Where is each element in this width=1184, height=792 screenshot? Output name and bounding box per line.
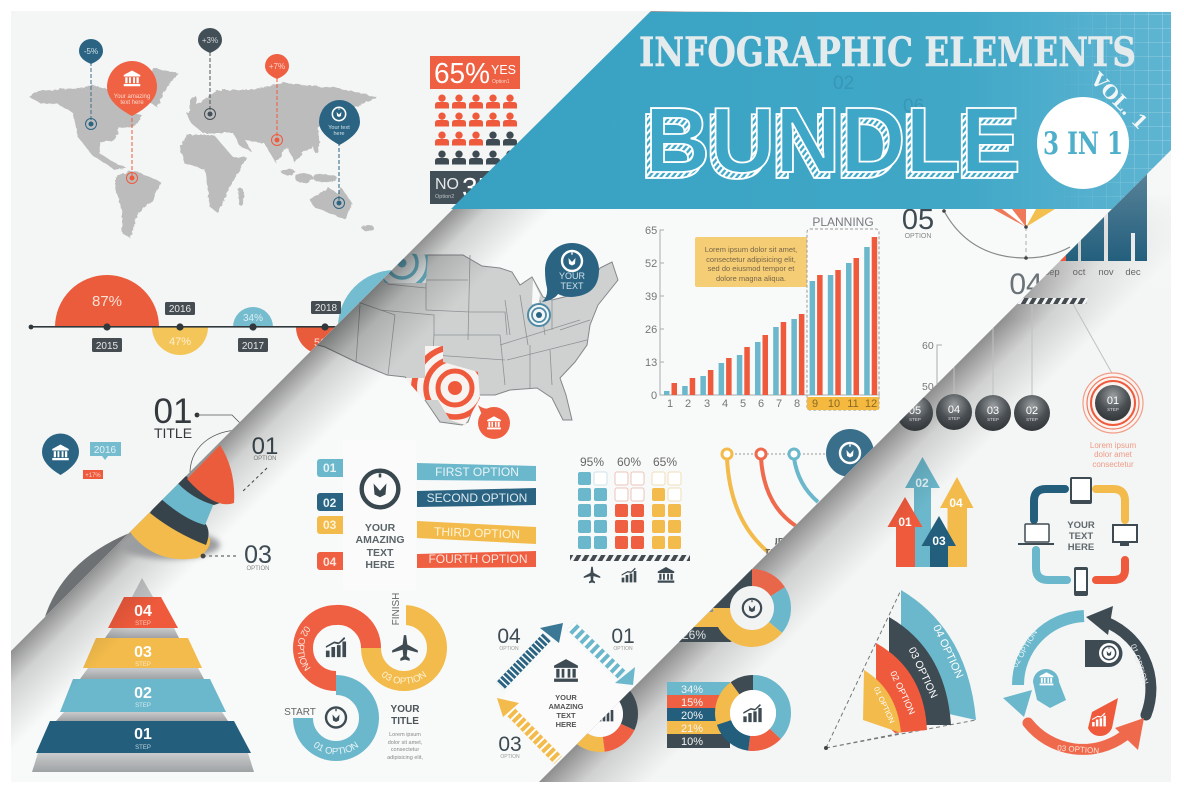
step 03 (83, 638, 202, 668)
icon: clock (326, 708, 346, 728)
arrow 01 dark: 01 OPTION (1129, 643, 1150, 686)
centre panel (343, 440, 416, 590)
no panel (430, 171, 490, 204)
icon marker and small tags (42, 434, 121, 479)
x axis labels: 4 (722, 398, 728, 410)
icon: clock (362, 471, 398, 507)
axis line and dots (29, 323, 371, 331)
numbered tab 04 (317, 552, 349, 570)
sphere 04: STEP (948, 416, 960, 421)
phone (1074, 567, 1088, 596)
tip (132, 578, 153, 597)
year label 2016: 2016 (169, 304, 192, 315)
x axis labels: 5 (740, 398, 746, 410)
yes panel: Option1 (492, 79, 510, 85)
diamond arrows panel (497, 623, 635, 762)
sphere 04 (936, 394, 972, 430)
world map (29, 68, 377, 238)
label 04: OPTION (499, 646, 519, 652)
sphere 01 with rings: 01 (1107, 395, 1119, 407)
monitor (1113, 525, 1137, 546)
Ohio target (528, 304, 550, 326)
x axis labels: 7 (776, 398, 782, 410)
S-shaped process (284, 594, 447, 761)
blue segment (303, 685, 369, 751)
hanging lines (954, 304, 1113, 395)
stacked strips: 34% (681, 684, 703, 696)
diamond text: HERE (556, 720, 576, 729)
donut with stacked bars: clock (676, 578, 782, 642)
arrow 02: 02 (915, 476, 929, 490)
hatched hanger (1013, 298, 1088, 304)
map pin: clock, your text here: Your text (328, 125, 350, 131)
people grid (435, 94, 517, 164)
map pin: -5%: -5% (84, 47, 98, 56)
step 04 (108, 597, 178, 628)
icon: plane (392, 635, 418, 661)
sphere 03: STEP (987, 417, 999, 422)
stacked strips: 26% (682, 628, 706, 642)
arrow 03 red (1028, 718, 1144, 755)
caption (1090, 441, 1136, 469)
fan diagram (824, 590, 976, 750)
ribbon fourth option: FOURTH OPTION (428, 552, 528, 566)
square pictogram chart (570, 455, 690, 583)
month labels: dec (1125, 267, 1141, 278)
Texas target (400, 340, 496, 430)
y axis fragment 60 / 50: 50 (922, 381, 934, 393)
yellow band (130, 512, 210, 559)
numbered tab 03 (317, 516, 349, 534)
centre text: HERE (365, 559, 395, 571)
US map (300, 255, 618, 425)
sphere 02: STEP (1026, 417, 1038, 422)
squares yellow column (652, 472, 681, 549)
x axis labels: 8 (794, 398, 800, 410)
donut ring (722, 682, 784, 744)
dark band upper (174, 476, 220, 505)
sphere 01 with rings: STEP (1107, 407, 1119, 412)
four up arrows (888, 457, 974, 567)
caption: Lorem ipsum (1090, 441, 1136, 450)
yellow note: dolore magna aliqua. (716, 274, 786, 283)
option list with clock panel (317, 440, 536, 590)
month labels: nov (1098, 267, 1114, 278)
bubble 87% (55, 275, 159, 327)
label 01 option: 01 (252, 433, 278, 460)
percent labels (580, 455, 677, 469)
year label 2015: 2015 (96, 341, 119, 352)
month labels: oct (1073, 267, 1086, 278)
icon: chart (326, 637, 346, 657)
percent labels: 60% (617, 455, 641, 469)
faint ghost numbers (833, 73, 924, 117)
sector 02: 02 OPTION (888, 669, 917, 716)
step 01 (36, 721, 251, 753)
arrow 04: 04 (949, 496, 963, 510)
label 01: OPTION (613, 646, 633, 652)
sphere 05: 05 (909, 405, 921, 417)
yes panel (430, 56, 520, 90)
vol. 1: VOL. 1 (1085, 68, 1152, 134)
icon: chart (622, 568, 636, 582)
hatched baseline (570, 555, 690, 561)
stacked strips: 15% (681, 697, 703, 709)
fold highlight at upper end (990, 140, 1184, 320)
diamond text (548, 693, 584, 729)
radial diagram fragment (942, 209, 1070, 260)
centre text (1067, 520, 1095, 553)
arrow 04 (500, 623, 563, 686)
banner background (451, 12, 1171, 209)
step 02: 02 (134, 685, 152, 702)
inner drop bank (1033, 669, 1066, 708)
laptop (1018, 524, 1054, 545)
arrow 03: 03 (932, 534, 946, 548)
donut ring (722, 578, 782, 638)
label 03 option: OPTION (246, 566, 270, 572)
yes/no people chart (430, 56, 520, 204)
arrow 01 dark (1086, 606, 1151, 715)
stacked strips: 10% (681, 736, 703, 748)
percent labels: 65% (653, 455, 677, 469)
curved label 03: 03 OPTION (382, 670, 426, 684)
faint ghost numbers: 06 (903, 96, 924, 117)
badge 3 in 1 (1037, 97, 1129, 189)
sphere 02 (1014, 395, 1050, 431)
step spheres (897, 298, 1143, 469)
step 01: 01 (134, 726, 152, 743)
x axis labels (668, 400, 877, 407)
map pin: clock, your text here: here (333, 131, 345, 137)
sector 01: 01 OPTION (872, 685, 897, 725)
x axis labels: 2 (685, 398, 691, 410)
sphere 02: 02 (1026, 405, 1038, 417)
donut with chart behind diamond (570, 684, 630, 744)
no panel: Option2 (435, 194, 454, 200)
yes panel: 65% (434, 58, 490, 90)
bubble 47%: 47% (169, 336, 191, 348)
label 03: 03 (498, 733, 522, 756)
your title text: YOUR (391, 704, 420, 715)
yes panel: YES (491, 63, 516, 77)
y axis labels: 13 (645, 357, 657, 369)
map pin: +7% (265, 54, 289, 146)
centre text (356, 522, 404, 571)
map pin: bank, your amazing text here (107, 61, 157, 184)
map pin: bank, your amazing text here: Your amazing (114, 94, 150, 100)
squares red column (615, 472, 644, 549)
y axis labels: 0 (651, 390, 657, 402)
x axis labels: 3 (704, 398, 710, 410)
axes (660, 230, 880, 395)
fragment 04 label: 04 (1009, 268, 1043, 301)
rocket shadow crescent (45, 534, 128, 617)
centre text: YOUR (365, 522, 396, 534)
step 03: STEP (135, 662, 151, 668)
ribbon first option: FIRST OPTION (435, 465, 519, 479)
numbered tab 01 (317, 459, 349, 477)
sphere 05 (897, 395, 933, 431)
finish tag: FINISH (391, 593, 402, 625)
year label 2018 (311, 301, 341, 314)
bubble 34%: 34% (243, 313, 263, 324)
curved label 01: 01 OPTION (314, 742, 358, 754)
arrow 02 blue: 02 OPTION (1010, 628, 1039, 669)
step 02: STEP (135, 703, 151, 709)
ribbon second option: SECOND OPTION (427, 491, 527, 505)
label 01: 01 (611, 625, 635, 648)
circular arrows (1003, 606, 1151, 755)
arrow 02 blue (1003, 616, 1084, 717)
grey connector slabs (32, 628, 254, 772)
sector 03: 03 OPTION (906, 645, 940, 700)
centre text: TEXT (367, 547, 394, 559)
x axis labels: 6 (758, 398, 764, 410)
finish tag (391, 593, 406, 628)
your title text: TITLE (391, 716, 419, 727)
sphere 01 with rings (1083, 373, 1143, 433)
red cap (187, 445, 234, 504)
rocket layered cone (120, 445, 234, 559)
label 04: 04 (497, 625, 521, 648)
label 03 option: 03 (244, 541, 272, 569)
diamond text: YOUR (555, 693, 577, 702)
ribbon first option (417, 463, 536, 481)
inner tab clock (1085, 640, 1122, 667)
option labels 05: OPTION (905, 233, 931, 240)
yellow note (695, 237, 809, 287)
diamond text: TEXT (556, 711, 576, 720)
y axis fragment 60 / 50 (922, 342, 942, 390)
banner BUNDLE: BUNDLE (640, 94, 1016, 198)
pin: your text: TEXT (560, 281, 584, 291)
y axis labels: 65 (645, 225, 657, 237)
blue band (160, 478, 214, 525)
numbered tab 02 (317, 493, 349, 511)
planning highlight: PLANNING (812, 215, 874, 229)
title 01: TITLE (154, 425, 192, 441)
title 01 (154, 398, 240, 472)
yellow note: consectetur adipisicing elit, (706, 255, 796, 264)
blue bars (664, 247, 870, 395)
centre text: HERE (1068, 542, 1094, 553)
sphere 03 (975, 395, 1011, 431)
squares blue column (578, 472, 607, 549)
red segment (303, 615, 371, 681)
map pin: +3%: +3% (202, 36, 218, 45)
ground shadow (120, 531, 220, 559)
x axis labels: 11 (847, 398, 859, 410)
monthly bars (1044, 150, 1147, 278)
sphere 03: 03 (987, 405, 999, 417)
sector 04 (901, 590, 976, 720)
faint ghost numbers: 02 (833, 73, 854, 94)
year label 2017: 2017 (242, 341, 265, 352)
step 04: 04 (134, 603, 152, 620)
curved label 02: 02 OPTION (298, 626, 310, 672)
arrow 03 (497, 698, 558, 760)
dots (201, 554, 205, 558)
map pin: -5% (79, 39, 103, 130)
panel: banner (451, 12, 1171, 209)
panel: first sheet, world map, people and timeline (29, 28, 570, 640)
curved lines with pins (722, 429, 874, 559)
large teal bubble (338, 270, 392, 324)
start tag (284, 703, 319, 718)
red bars (672, 237, 877, 395)
centre text: AMAZING (356, 534, 404, 546)
curved lines with pins: YOUR (756, 537, 786, 548)
stacked strips: 21% (681, 723, 703, 735)
y axis labels: 52 (645, 258, 657, 270)
month labels (1044, 267, 1141, 278)
icon: bank (658, 567, 674, 583)
arrow 03 red: 03 OPTION (1057, 744, 1100, 755)
no panel: NO (435, 176, 459, 193)
ribbon fourth option (417, 551, 536, 568)
tag 2016: 2016 (94, 445, 117, 456)
numbered tab 01: 01 (323, 461, 337, 475)
x axis labels: 12 (865, 398, 877, 410)
teal state target (370, 237, 430, 289)
caption: consectetur (1092, 460, 1134, 469)
year label 2016 (165, 302, 195, 315)
badge 3 in 1: 3 IN 1 (1043, 126, 1123, 162)
year label 2018: 2018 (315, 303, 338, 314)
sector 01 (863, 670, 901, 733)
bubble 5x%: 56% (314, 337, 336, 349)
icon: plane (584, 567, 600, 583)
sector 04: 04 OPTION (930, 623, 965, 680)
centre text: YOUR (1067, 520, 1095, 531)
planning highlight (807, 215, 879, 410)
bubble 47% (152, 327, 208, 355)
sphere 05: STEP (909, 417, 921, 422)
connectors (1034, 489, 1125, 580)
dark tab peeking under banner (505, 209, 570, 214)
diamond text: AMAZING (548, 702, 584, 711)
pin: your text (542, 243, 599, 302)
white diamond (503, 632, 631, 762)
your title text: Lorem ipsum (389, 732, 421, 738)
y axis labels: 39 (645, 291, 657, 303)
year label 2015 (92, 338, 122, 352)
y axis fragment 60 / 50: 60 (922, 340, 934, 352)
yellow note: Lorem ipsum dolor sit amet, (705, 245, 797, 254)
map pin: clock, your text here (319, 100, 360, 208)
map pin: bank, your amazing text here: text here (120, 100, 144, 106)
sector 03 (889, 617, 951, 725)
step 04: STEP (135, 621, 151, 627)
y axis labels: 26 (645, 324, 657, 336)
icon: bank (554, 659, 578, 682)
numbered tab 02: 02 (323, 496, 337, 510)
option labels for rocket (203, 433, 278, 572)
pyramid (32, 578, 254, 772)
percent labels: 95% (580, 455, 604, 469)
your title text: dolor sit amet, (388, 740, 423, 746)
timeline (28, 270, 392, 355)
ribbon third option (417, 521, 536, 544)
yellow segment (371, 615, 437, 681)
dashed connector (242, 468, 267, 492)
map pin: +7%: +7% (269, 62, 285, 71)
x axis labels: 10 (828, 398, 840, 410)
bubble 87%: 87% (92, 293, 122, 310)
inner drop chart (1088, 698, 1118, 736)
start tag: START (284, 707, 316, 718)
dark band lower (150, 498, 209, 545)
year label 2017 (238, 338, 268, 352)
numbered tab 04: 04 (323, 555, 337, 569)
caption: dolor amet (1094, 450, 1133, 459)
label 01 option: OPTION (253, 456, 277, 462)
yellow note: sed do eiusmod tempor et (708, 264, 795, 273)
step 01: STEP (135, 745, 151, 751)
dashed guides (826, 590, 976, 748)
step 03: 03 (134, 644, 152, 661)
your title text: adipisicing elit, (387, 755, 423, 761)
banner BUNDLE: BUNDLE (645, 88, 1021, 192)
bubble 5x% (296, 327, 335, 352)
month labels: sep (1044, 267, 1060, 278)
donut with stacked bars: chart (667, 682, 784, 748)
y axis labels (645, 225, 657, 402)
bubble 34% (233, 307, 273, 327)
tablet (1070, 477, 1092, 504)
banner grid (900, 12, 1171, 209)
your title text (387, 704, 423, 761)
x axis labels: 9 (812, 398, 818, 410)
centre text: TEXT (1069, 531, 1093, 542)
tag red: +17% (85, 473, 101, 479)
sector 02 (876, 643, 927, 733)
sphere 04: 04 (948, 404, 960, 416)
map pin: +3% (198, 28, 222, 120)
your title text: consectetur (391, 747, 419, 753)
arrow 01: 01 (898, 515, 912, 529)
ribbon third option: THIRD OPTION (434, 525, 520, 541)
pin: your text: YOUR (559, 271, 585, 281)
step 02 (60, 679, 226, 712)
dashed connector (203, 555, 237, 557)
no panel: 35% (462, 172, 518, 203)
title 01: 01 (154, 392, 192, 431)
stacked strips: 20% (681, 710, 703, 722)
ribbon second option (417, 488, 536, 507)
label 03: OPTION (500, 754, 520, 760)
devices ring (1018, 477, 1137, 596)
bar chart (645, 215, 880, 410)
x axis labels: 1 (667, 398, 673, 410)
stacked strips (667, 682, 730, 748)
curved lines with pins: TITLE (755, 548, 783, 559)
pin: bank (478, 405, 510, 439)
icon: bank pin (42, 434, 79, 475)
numbered tab 03: 03 (323, 518, 337, 532)
option labels 05: 05 (902, 204, 934, 236)
arrow 01 (571, 626, 635, 685)
